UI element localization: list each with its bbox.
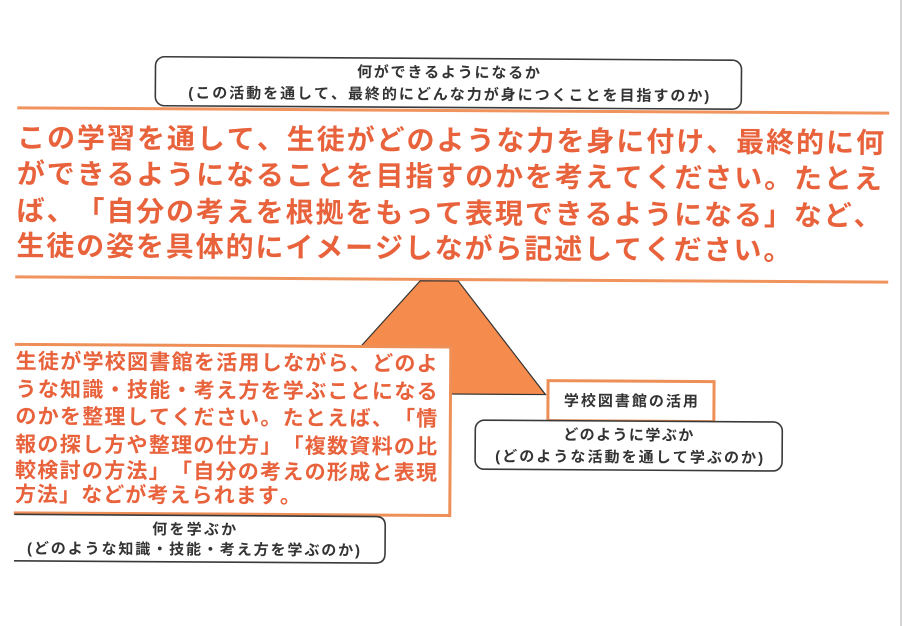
label box: what students can do: 何ができるようになるか <box>357 63 540 82</box>
instruction text: goal <box>16 121 884 267</box>
panel: school library use <box>548 381 714 422</box>
panel: what to learn: 報の探し方や整理の仕方」「複数資料の比 <box>15 433 437 459</box>
instruction text: goal: ができるようになることを目指すのかを考えてください。たとえ <box>17 157 882 195</box>
label box: what to learn: (どのような知識・技能・考え方を学ぶのか) <box>27 539 360 559</box>
label box: how to learn: (どのような活動を通して学ぶのか) <box>495 447 763 467</box>
top orange rule <box>17 106 889 115</box>
orange triangle <box>319 280 546 395</box>
panel: what to learn <box>14 344 451 515</box>
instruction text: goal: この学習を通して、生徒がどのような力を身に付け、最終的に何 <box>17 121 884 159</box>
instruction text: goal: ば、「自分の考えを根拠をもって表現できるようになる」など、 <box>17 195 882 232</box>
instruction text: goal: 生徒の姿を具体的にイメージしながら記述してください。 <box>16 229 791 266</box>
label box: what students can do: (この活動を通して、最終的にどんな力が身につくことを目指すのか) <box>188 84 709 105</box>
label box: what students can do <box>155 57 742 109</box>
label box: how to learn <box>475 420 782 471</box>
panel: what to learn: うな知識・技能・考え方を学ぶことになる <box>15 378 438 404</box>
panel: school library use: 学校図書館の活用 <box>564 392 698 411</box>
panel: what to learn: 方法」などが考えられます。 <box>15 482 301 508</box>
label box: what to learn: 何を学ぶか <box>152 520 236 539</box>
label box: what to learn <box>14 514 385 563</box>
bottom orange rule <box>15 275 888 284</box>
panel: what to learn: 較検討の方法」「自分の考えの形成と表現 <box>15 458 437 485</box>
panel: what to learn: のかを整理してください。たとえば、「情 <box>15 405 437 431</box>
label box: how to learn: どのように学ぶか <box>563 426 693 444</box>
panel: what to learn: 生徒が学校図書館を活用しながら、どのよ <box>16 349 438 376</box>
